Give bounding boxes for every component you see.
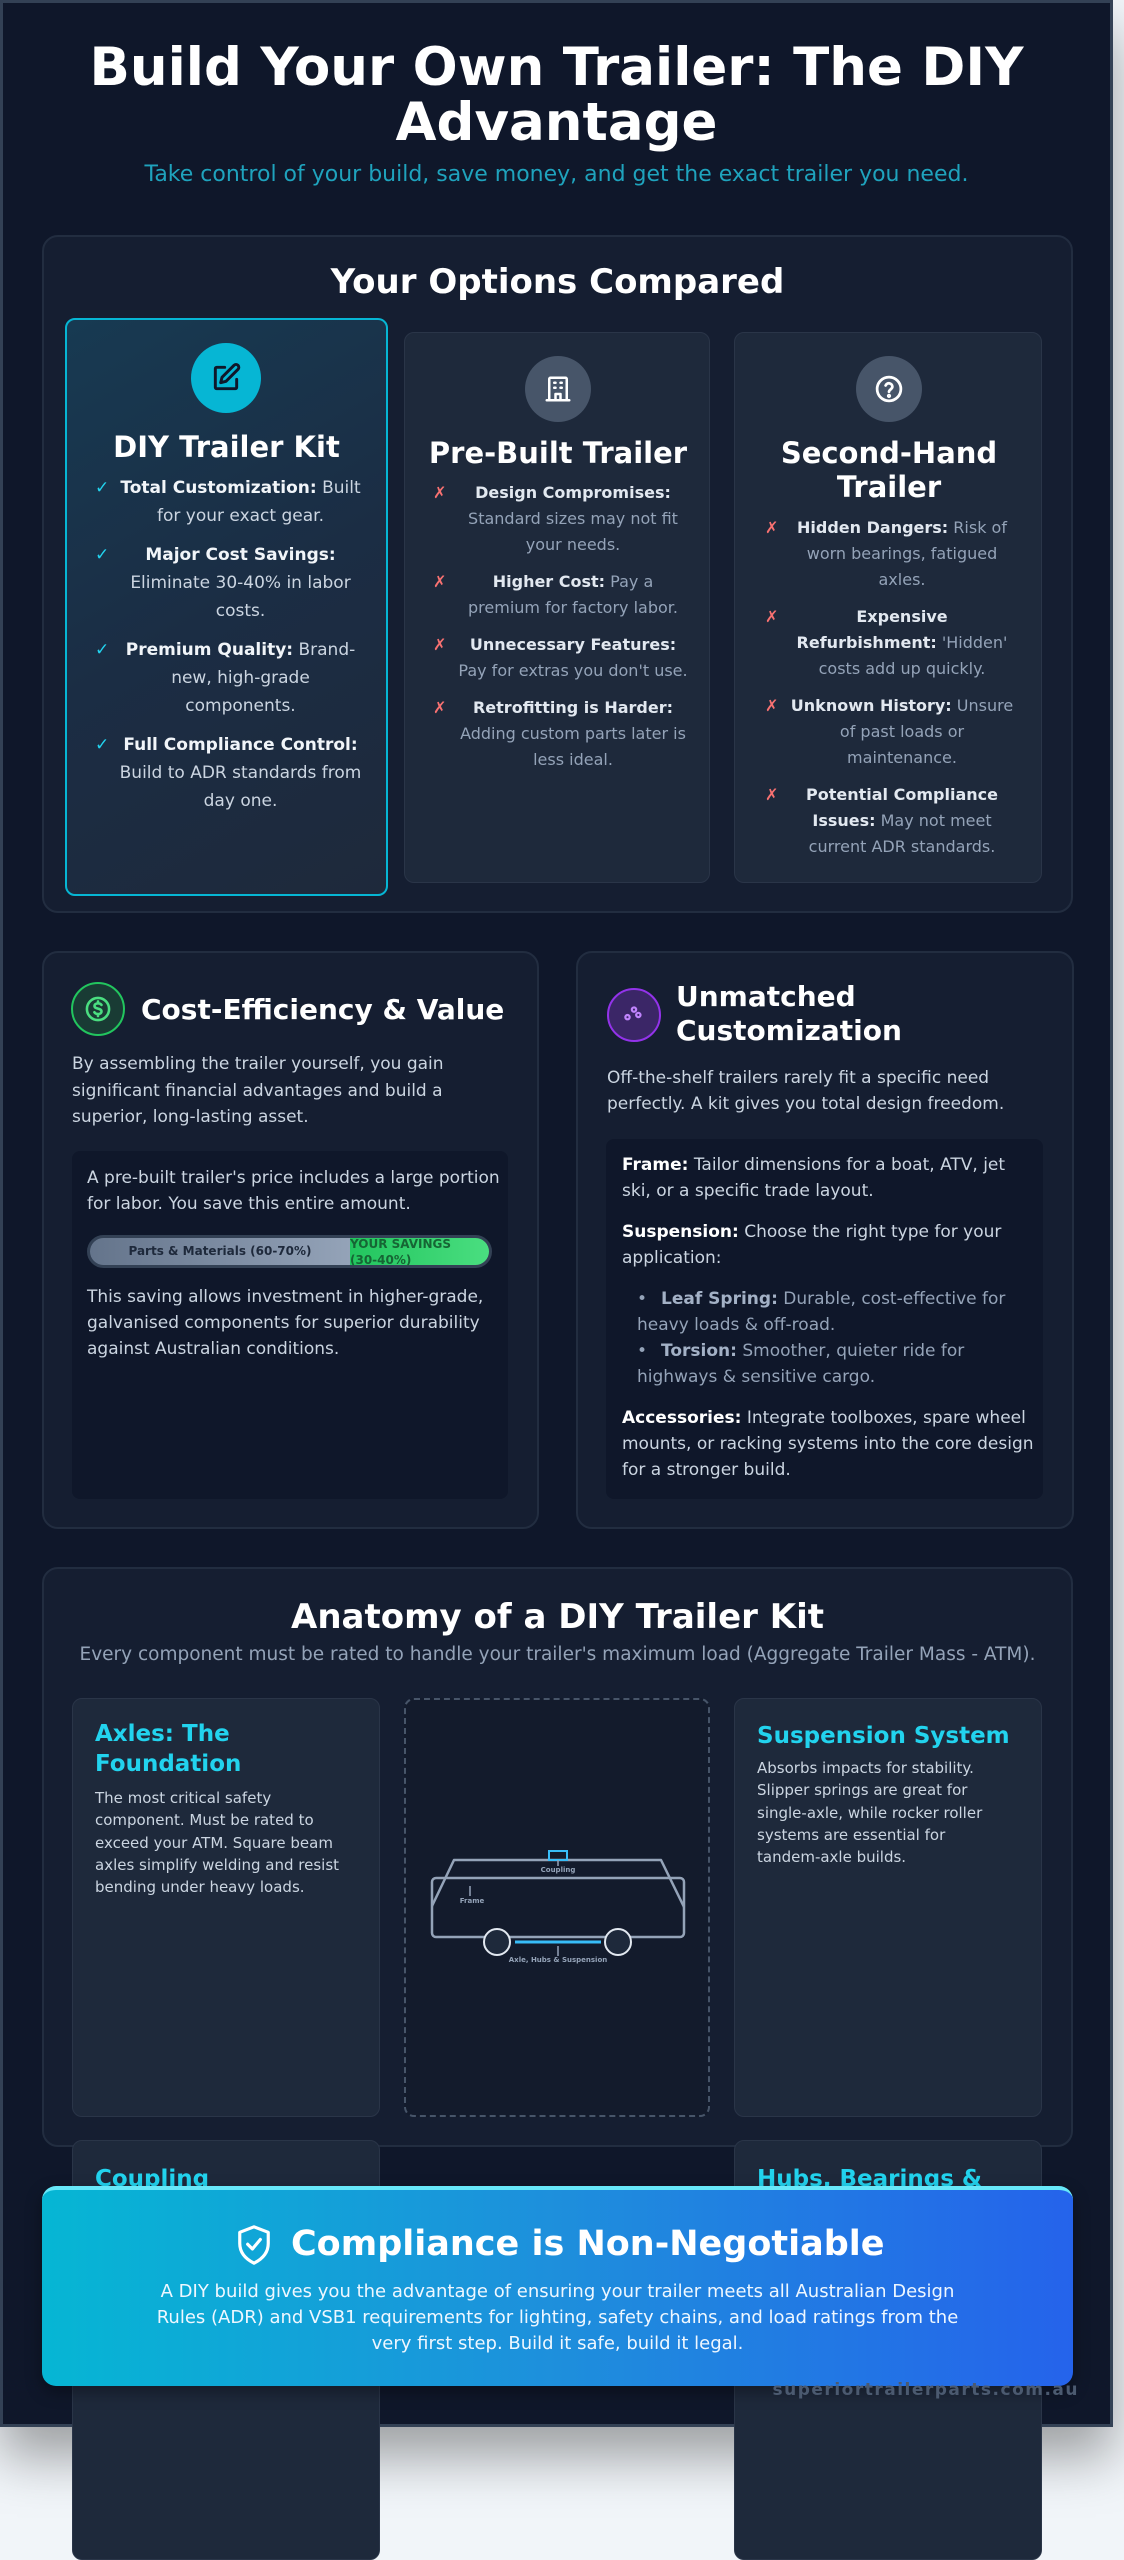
text: This saving allows investment in higher-grade, galvanised components for superior durability against Australian conditions.: [87, 1287, 483, 1359]
panel: anatomy: [42, 1567, 1073, 2147]
title: Advantage: [396, 92, 718, 153]
frame: Frame: Tailor dimensions for a boat, ATV, jet ski, or a specific trade layout.: [622, 1155, 1005, 1201]
diagram: trailer: Axle, Hubs & Suspension: [509, 1956, 607, 1964]
list: pre-built drawbacks: Pay for extras you don't use.: [458, 661, 688, 680]
card: DIY trailer kit: [65, 318, 388, 896]
icon: building: [525, 356, 591, 422]
list: second-hand drawbacks: Potential Compliance Issues: May not meet current ADR standards.: [806, 785, 998, 856]
card: hubs: Hubs, Bearings &: [757, 2166, 982, 2192]
heading: Cost-Efficiency & Value: [141, 993, 504, 1026]
list: pre-built drawbacks: Retrofitting is Harder:: [473, 698, 673, 717]
list: pre-built drawbacks: ✗: [433, 572, 446, 591]
list: second-hand drawbacks: [765, 518, 1013, 856]
list: DIY benefits: ✓: [95, 478, 109, 498]
card: second-hand trailer: [734, 332, 1042, 883]
heading: Second-Hand: [781, 436, 997, 470]
bar chart: cost split: Parts & Materials (60-70%): [128, 1244, 312, 1258]
list: DIY benefits: Premium Quality: Brand-new, high-grade components.: [126, 640, 355, 716]
list: DIY benefits: ✓: [95, 735, 109, 755]
card: axles: [72, 1698, 380, 2117]
suspension options: • Torsion: Smoother, quieter ride for highways & sensitive cargo.: [637, 1341, 964, 1387]
card: axles: Axles: The Foundation: [95, 1721, 241, 1777]
card: hubs: [734, 2140, 1042, 2560]
list: DIY benefits: Total Customization: Built for your exact gear.: [120, 478, 361, 526]
list: DIY benefits: [95, 478, 361, 811]
list: pre-built drawbacks: ✗: [433, 635, 446, 654]
list: pre-built drawbacks: Unnecessary Features:: [470, 635, 676, 654]
heading: DIY Trailer Kit: [113, 430, 340, 464]
list: pre-built drawbacks: ✗: [433, 698, 446, 717]
list: pre-built drawbacks: [433, 483, 688, 769]
list: second-hand drawbacks: Expensive Refurbishment: 'Hidden' costs add up quickly.: [797, 607, 1007, 678]
heading: Customization: [676, 1014, 902, 1047]
panel: customization: [576, 951, 1074, 1529]
card: coupling: Coupling: [95, 2166, 209, 2192]
title: Build Your Own Trailer: The DIY: [90, 37, 1023, 98]
heading: Trailer: [837, 470, 941, 504]
intro text: By assembling the trailer yourself, you gain significant financial advantages and build a superior, long-lasting asset.: [72, 1054, 444, 1127]
subtitle: Take control of your build, save money, and get the exact trailer you need.: [145, 162, 968, 187]
list: pre-built drawbacks: Standard sizes may not fit: [468, 509, 678, 528]
body text: A DIY build gives you the advantage of ensuring your trailer meets all Australian Design Rules (ADR) and VSB1 requirements for lighting, safety chains, and load ratings from the very first step. Build it safe, build it legal.: [157, 2281, 958, 2354]
bar chart: cost split: [87, 1235, 492, 1268]
options box: [606, 1139, 1043, 1499]
heading: Compliance is Non-Negotiable: [291, 2224, 885, 2264]
savings box: [72, 1151, 508, 1499]
footer: website: superiortrailerparts.com.au: [773, 2380, 1079, 2400]
heading: anatomy: Anatomy of a DIY Trailer Kit: [291, 1597, 824, 1637]
suspension: Suspension: Choose the right type for your application:: [622, 1222, 1001, 1268]
list: pre-built drawbacks: your needs.: [526, 535, 620, 554]
heading: Pre-Built Trailer: [429, 436, 687, 470]
card: coupling: [72, 2140, 380, 2560]
list: pre-built drawbacks: premium for factory labor.: [468, 598, 678, 617]
accessories: Accessories: Integrate toolboxes, spare wheel mounts, or racking systems into the core design for a stronger build.: [622, 1408, 1034, 1480]
list: DIY benefits: Full Compliance Control: Build to ADR standards from day one.: [120, 735, 361, 811]
suspension options: • Leaf Spring: Durable, cost-effective for heavy loads & off-road.: [637, 1289, 1005, 1335]
panel: options compared: [42, 235, 1073, 913]
heading: [676, 980, 902, 1047]
heading: [781, 436, 997, 504]
list: second-hand drawbacks: Hidden Dangers: Risk of worn bearings, fatigued axles.: [797, 518, 1007, 589]
list: pre-built drawbacks: Higher Cost: Pay a: [493, 572, 653, 591]
card: pre-built trailer: [404, 332, 710, 883]
diagram: trailer: [404, 1698, 710, 2117]
icon: pencil: [191, 343, 261, 413]
list: DIY benefits: ✓: [95, 640, 109, 660]
text: A pre-built trailer's price includes a large portion for labor. You save this entire amount.: [87, 1168, 500, 1214]
callout: compliance: [42, 2186, 1073, 2386]
list: second-hand drawbacks: Unknown History: Unsure of past loads or maintenance.: [791, 696, 1013, 767]
list: second-hand drawbacks: ✗: [765, 518, 778, 537]
card: axles: The most critical safety component. Must be rated to exceed your ATM. Square beam axles simplify welding and resist bending under heavy loads.: [95, 1789, 339, 1896]
heading: your options compared: Your Options Compared: [331, 262, 784, 302]
list: second-hand drawbacks: ✗: [765, 785, 778, 804]
panel: cost efficiency: [42, 951, 539, 1529]
list: pre-built drawbacks: ✗: [433, 483, 446, 502]
card: suspension: Absorbs impacts for stability. Slipper springs are great for single-axle, while rocker roller systems are essential for tandem-axle builds.: [757, 1759, 982, 1866]
list: DIY benefits: ✓: [95, 545, 109, 565]
diagram: trailer: Coupling: [541, 1866, 575, 1874]
suspension options: [637, 1289, 1006, 1387]
list: pre-built drawbacks: less ideal.: [533, 750, 613, 769]
subtitle: anatomy: Every component must be rated to handle your trailer's maximum load (Aggregate Trailer Mass - ATM).: [80, 1644, 1035, 1665]
icon: palette: [607, 988, 661, 1042]
heading: Unmatched: [676, 980, 856, 1013]
icon: dollar: [71, 982, 125, 1036]
list: DIY benefits: Major Cost Savings: Eliminate 30-40% in labor costs.: [130, 545, 351, 621]
diagram: trailer: Frame: [460, 1897, 485, 1905]
list: second-hand drawbacks: ✗: [765, 696, 778, 715]
icon: question: [856, 356, 922, 422]
title: [90, 37, 1024, 153]
list: second-hand drawbacks: ✗: [765, 607, 778, 626]
icon: shield: [238, 2225, 270, 2265]
list: pre-built drawbacks: Adding custom parts later is: [460, 724, 686, 743]
card: suspension: [734, 1698, 1042, 2117]
bar chart: cost split: YOUR SAVINGS (30-40%): [350, 1237, 451, 1267]
card: suspension: Suspension System: [757, 1723, 1010, 1749]
list: pre-built drawbacks: Design Compromises:: [475, 483, 671, 502]
intro text: Off-the-shelf trailers rarely fit a specific need perfectly. A kit gives you total design freedom.: [607, 1068, 1004, 1114]
